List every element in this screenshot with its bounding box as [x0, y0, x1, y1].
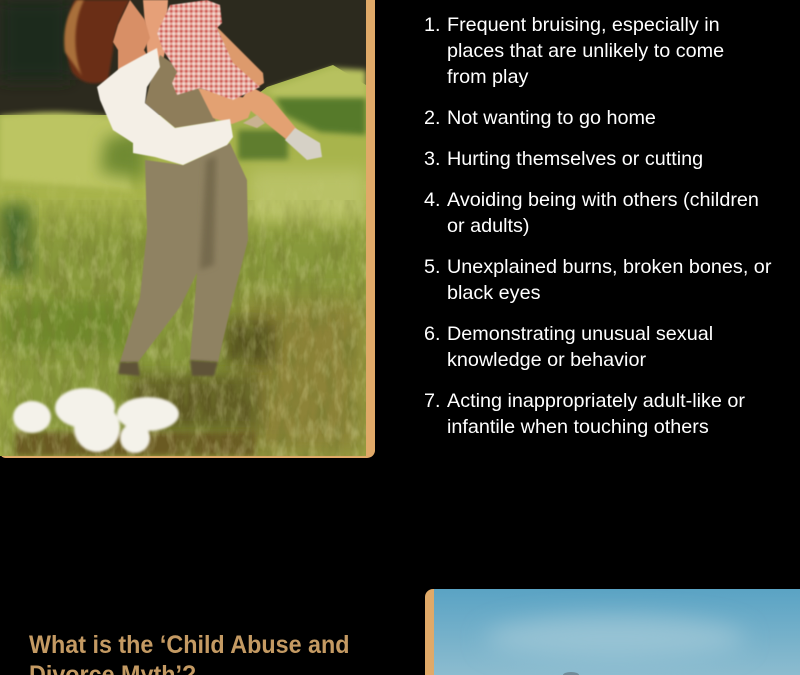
photo [0, 0, 366, 456]
shirt [97, 48, 233, 165]
numbered list of warning signs: Demonstrating unusual sexual [447, 323, 713, 345]
item 5 [424, 256, 772, 304]
numbered list of warning signs: Not wanting to go home [447, 107, 656, 129]
item 3 [424, 148, 703, 170]
numbered list of warning signs: black eyes [447, 282, 540, 304]
woman hair [66, 0, 130, 83]
numbered list of warning signs: knowledge or behavior [447, 349, 646, 371]
numbered list of warning signs: Hurting themselves or cutting [447, 148, 703, 170]
item 6: 6. [424, 323, 440, 345]
numbered list of warning signs: from play [447, 66, 528, 88]
item 1 [424, 14, 724, 88]
heading: child abuse and divorce myth: What is the ‘Child Abuse and [29, 631, 350, 659]
item 1: 1. [424, 14, 440, 36]
item 6 [424, 323, 713, 371]
overalls top [145, 55, 216, 128]
photo panel: mother holding child in meadow [0, 0, 375, 458]
shoes [118, 360, 218, 376]
white flowers [13, 388, 179, 453]
numbered list of warning signs: Avoiding being with others (children [447, 189, 759, 211]
face and neck [113, 0, 150, 72]
item 4: 4. [424, 189, 440, 211]
frame: tan border [0, 0, 375, 458]
numbered list of warning signs: or adults) [447, 215, 529, 237]
item 4 [424, 189, 759, 237]
photo panel: blue sky with tan left edge [425, 589, 800, 675]
numbered list of warning signs: Unexplained burns, broken bones, or [447, 256, 771, 278]
item 5: 5. [424, 256, 440, 278]
child dress [157, 0, 260, 100]
trousers [120, 143, 248, 362]
item 2: 2. [424, 107, 440, 129]
numbered list of warning signs: Frequent bruising, especially in [447, 14, 720, 36]
numbered list of warning signs [424, 14, 772, 438]
child right arm [215, 25, 264, 92]
child raised arm and skin between figures [143, 0, 168, 64]
numbered list of warning signs: places that are unlikely to come [447, 40, 724, 62]
numbered list of warning signs: Acting inappropriately adult-like or [447, 390, 745, 412]
numbered list of warning signs: infantile when touching others [447, 416, 709, 438]
child legs [198, 88, 255, 124]
item 3: 3. [424, 148, 440, 170]
heading: child abuse and divorce myth [29, 631, 350, 675]
item 7: 7. [424, 390, 440, 412]
sandals [285, 128, 322, 160]
item 7 [424, 390, 745, 438]
item 2 [424, 107, 656, 129]
